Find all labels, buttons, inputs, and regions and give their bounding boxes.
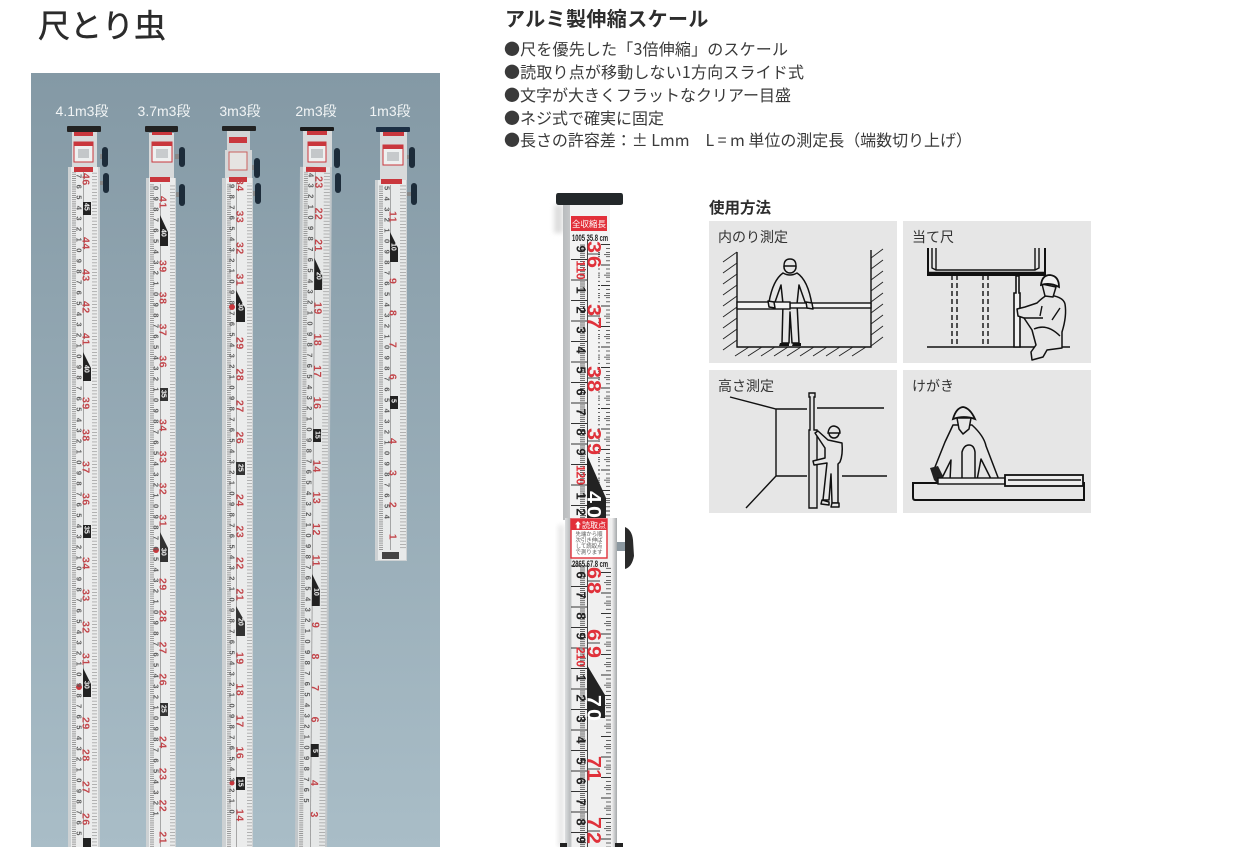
panel: scribing: けがき <box>912 378 954 394</box>
model labels: 4.1m3段 <box>56 103 108 119</box>
label: full length <box>571 216 607 231</box>
illustration: room corner <box>730 397 887 508</box>
scale: 2m: 10 <box>312 588 319 596</box>
red digits: 7 <box>582 817 604 829</box>
usage heading: 使用方法 <box>709 198 772 217</box>
heading: product name: アルミ製伸縮スケール <box>505 8 709 31</box>
scale: 4.1m: 30 <box>82 681 90 689</box>
black digits: 6 <box>574 777 588 785</box>
red digits: 3 <box>582 366 604 378</box>
scale: 1m: 10 <box>390 243 396 251</box>
black digits: 5 <box>574 366 588 374</box>
model labels: 1m3段 <box>369 103 411 119</box>
scale: 3.7m: 41 <box>156 196 168 209</box>
scale: 2m: 23 22 21 <box>312 176 324 252</box>
panel: scribing <box>903 370 1091 513</box>
black digits: 120 <box>574 465 588 485</box>
scale: 2m: 15 <box>314 431 321 439</box>
red digits: 7 <box>582 695 604 707</box>
scale: 2m: 5 <box>311 749 318 753</box>
scale: 1m: 5 <box>390 399 396 403</box>
panel: five scale models <box>31 73 440 847</box>
scale: 4.1m: 29 28 27 26 <box>80 717 92 826</box>
black digits: 7 <box>574 408 588 416</box>
panel: height measurement: 高さ測定 <box>718 378 774 394</box>
feature list: ●文字が大きくフラットなクリアー目盛 <box>504 82 791 106</box>
scale: 4.1m: 34 33 32 31 <box>80 557 92 666</box>
model labels: 3m3段 <box>219 103 261 119</box>
feature list: ●長さの許容差：± Lmm L = m 単位の測定長（端数切り上げ） <box>504 127 972 151</box>
label: full length: 全収縮長 <box>572 219 606 229</box>
model labels <box>56 103 411 119</box>
scale: 1m: 9 8 7 6 <box>386 278 398 380</box>
scale: 2m: 20 <box>315 272 322 280</box>
panel: height measurement <box>709 370 897 513</box>
panel: reference measure <box>903 221 1091 363</box>
illustration: kneeling worker <box>930 407 999 484</box>
illustration: workpiece <box>913 483 1084 500</box>
illustration: walls and floor <box>723 249 883 356</box>
red digits: 6 <box>582 567 604 579</box>
feature list <box>504 36 972 151</box>
illustration: scale on workpiece <box>938 475 1083 486</box>
scale: 2m <box>295 127 341 847</box>
illustration: extended scale <box>809 393 817 508</box>
red digits: 2 <box>582 832 604 844</box>
illustration: standing worker <box>813 426 842 507</box>
label: reading point: で測ります <box>576 548 602 556</box>
soft shadow <box>554 205 563 233</box>
panel: reference measure: 当て尺 <box>912 229 954 245</box>
title: 尺とり虫 <box>38 8 166 44</box>
red digits: 0 <box>582 506 604 518</box>
upper section <box>563 200 610 520</box>
label: reading point: して読取点 <box>576 542 603 550</box>
scale: 3m: 14 <box>234 809 246 822</box>
scale: 2m: 4 3 <box>308 780 320 818</box>
scale: 3.7m: 35 <box>160 390 166 398</box>
scale: 3.7m <box>145 126 185 847</box>
scale: 3m: 15 <box>236 779 244 787</box>
panel background <box>31 73 440 847</box>
red digits: 8 <box>582 380 604 392</box>
scale: 3m: 20 <box>236 618 244 626</box>
scale: 3.7m: 30 <box>160 548 166 556</box>
red digits <box>582 241 604 518</box>
illustration: ground <box>927 346 1070 348</box>
scale: 3.7m: 25 <box>160 705 166 713</box>
scale: 1m <box>375 127 417 561</box>
black digits: 3 <box>574 326 588 334</box>
black digits: 1 <box>574 492 588 500</box>
scale: 1m: 54321098765432109876543210987654 <box>382 186 392 525</box>
red digits: 7 <box>582 756 604 768</box>
scale: 3m: 987654321098765432109876543210987654321098765432109876543210 <box>228 184 236 820</box>
black digits: 8 <box>574 612 588 620</box>
scale: 2m: 9 8 7 6 <box>308 622 321 723</box>
black digits <box>574 571 588 844</box>
illustration: crouching worker <box>1017 275 1066 360</box>
black digits: 2 <box>574 694 588 702</box>
scale: 3m: 19 18 17 16 <box>234 652 246 759</box>
extended length reading: 2865 67.8 cm <box>572 559 608 569</box>
scale: 3m: 34 33 32 31 <box>234 179 246 286</box>
black digits: 8 <box>574 818 588 826</box>
scale: 4.1m <box>67 126 109 847</box>
red digits: 3 <box>582 241 604 253</box>
scale: 2m: 432109876543210987654321098765432109876543210987654321098765 <box>302 173 315 809</box>
label: reading point: 次引き伸ば <box>576 536 603 544</box>
feature list: ●ネジ式で確実に固定 <box>504 105 664 129</box>
red digits: 0 <box>582 709 604 721</box>
scale: 4.1m: 39 38 37 36 <box>80 397 92 506</box>
red digits: 3 <box>582 304 604 316</box>
red digits: 6 <box>582 256 604 268</box>
red digits: 7 <box>582 317 604 329</box>
red digits: 4 <box>582 491 604 503</box>
feature list: ●読取り点が移動しない1方向スライド式 <box>504 59 804 83</box>
scale: 4.1m: 44 43 42 41 <box>80 237 92 346</box>
black digits: 7 <box>574 798 588 806</box>
model labels: 3.7m3段 <box>138 103 190 119</box>
illustration: scale held up <box>1014 276 1020 347</box>
black digits <box>574 245 588 516</box>
scale: 3.7m: 34 33 32 31 <box>156 419 168 527</box>
black digits: 4 <box>574 346 588 354</box>
panel: inside measurement <box>709 221 897 363</box>
scale: 3m: 25 <box>236 464 244 472</box>
black digits: 3 <box>574 715 588 723</box>
scale: 3m <box>222 126 261 847</box>
illustration: dashed marks <box>952 275 988 347</box>
panel: inside measurement: 内のり測定 <box>718 229 788 245</box>
black digits: 4 <box>574 736 588 744</box>
black digits: 9 <box>574 245 588 253</box>
black digits: 210 <box>574 647 588 667</box>
black digits: 2 <box>574 508 588 516</box>
black digits: 1 <box>574 286 588 294</box>
black digits: 1 <box>574 674 588 682</box>
scale: 3m: 30 <box>236 303 244 311</box>
red digits: 8 <box>582 582 604 594</box>
black digits: 9 <box>574 448 588 456</box>
red digits <box>582 567 604 844</box>
scale: 4.1m: 46 <box>80 173 92 186</box>
scale: 4.1m: 40 <box>82 365 90 373</box>
black digits: 6 <box>574 388 588 396</box>
large scale photo <box>554 193 634 847</box>
thumb screw <box>617 527 634 569</box>
lower section <box>558 518 623 847</box>
feature list: ●尺を優先した「3倍伸縮」のスケール <box>504 36 788 60</box>
scale: 4.1m: 765432109876543210987654321098765432109876543210987654321098765 <box>74 174 84 842</box>
scale: 1m: 11 <box>386 211 398 223</box>
illustration: overhead frame <box>928 248 1045 275</box>
label: reading point: ⬆読取点 <box>574 520 606 530</box>
black digits: 9 <box>574 836 588 844</box>
scale: 3m: 24 23 22 21 <box>234 494 246 601</box>
scale: 2m: 14 13 12 11 <box>310 460 322 567</box>
scale: 3.7m: 24 23 22 21 <box>156 736 168 844</box>
black digits: 5 <box>574 757 588 765</box>
closed length reading: 1005 35.8 cm <box>572 233 608 243</box>
scale: 3m: 29 28 27 26 <box>234 337 246 444</box>
model labels: 2m3段 <box>295 103 337 119</box>
black digits: 7 <box>574 591 588 599</box>
scale: 3.7m: 39 38 37 36 <box>156 260 168 368</box>
scale: 3.7m: 29 28 27 26 <box>156 578 168 686</box>
scale: 2m: 19 18 17 16 <box>311 302 324 410</box>
illustration: worker holding scale <box>737 259 871 346</box>
black digits: 2 <box>574 306 588 314</box>
scale: 4.1m: 35 <box>82 526 90 534</box>
scale: 3.7m: 098765432109876543210987654321098765432109876543210987654321 <box>152 186 160 822</box>
black digits: 9 <box>574 632 588 640</box>
red digits: 9 <box>582 443 604 455</box>
red digits: 6 <box>582 629 604 641</box>
red digits: 3 <box>582 428 604 440</box>
red digits: 1 <box>582 769 604 781</box>
black digits: 6 <box>574 571 588 579</box>
label: reading point: 先端から順 <box>576 530 603 538</box>
black digits: 8 <box>574 428 588 436</box>
black digits: 110 <box>574 260 588 280</box>
scale: 1m: 4 3 2 1 <box>386 438 398 540</box>
scale: 4.1m: 45 <box>82 203 90 211</box>
scale: 3.7m: 40 <box>160 229 166 237</box>
red digits: 9 <box>582 646 604 658</box>
label: reading point <box>571 519 607 558</box>
end cap <box>556 193 623 205</box>
